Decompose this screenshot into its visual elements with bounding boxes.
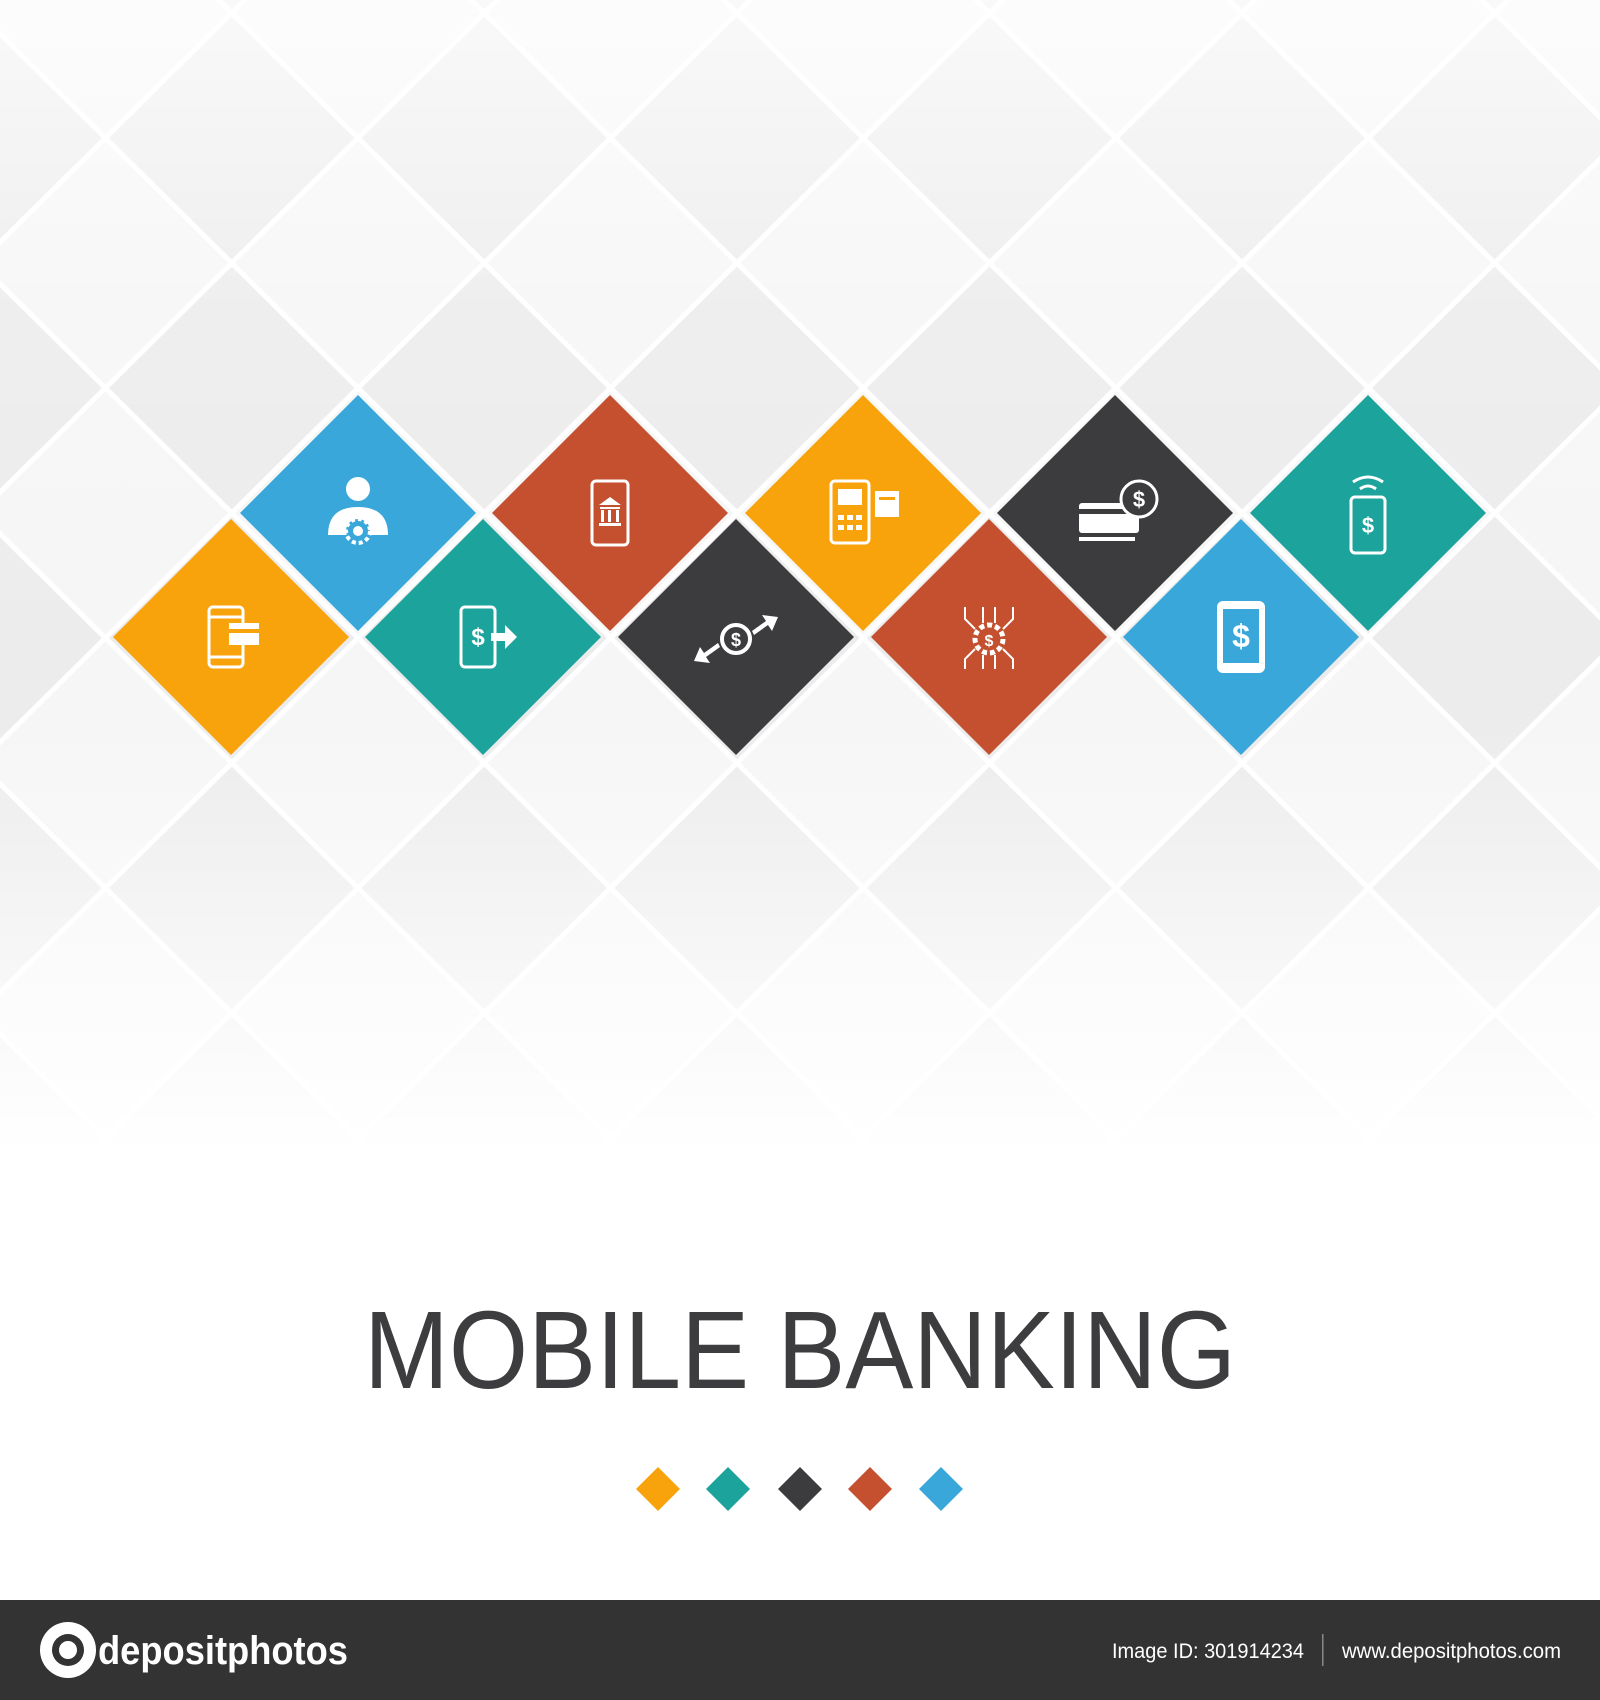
diamond: dark exchange: $ bbox=[731, 630, 741, 650]
diamond: yellow mobile card bbox=[113, 519, 349, 755]
diamond: teal mobile transfer: $ bbox=[471, 624, 485, 651]
footer bar: depositphotos bbox=[98, 1629, 348, 1673]
diamond: dark card coin: $ bbox=[1133, 487, 1145, 512]
diamond: dark card coin bbox=[997, 395, 1233, 631]
diamond: red mobile bank bbox=[492, 395, 728, 631]
diamond: blue mobile dollar: $ bbox=[1232, 618, 1250, 654]
title: MOBILE BANKING bbox=[364, 1289, 1236, 1412]
diamond: yellow card terminal bbox=[745, 395, 981, 631]
color dots bbox=[636, 1467, 963, 1511]
diamond: teal contactless mobile bbox=[1250, 395, 1486, 631]
footer bar bbox=[0, 1600, 1600, 1700]
diamond: teal contactless mobile: $ bbox=[1362, 513, 1374, 538]
diamond: red fintech gear: $ bbox=[985, 633, 994, 650]
diamond: blue mobile dollar bbox=[1123, 519, 1359, 755]
diamond: blue user gear bbox=[240, 395, 476, 631]
diamond: dark exchange bbox=[618, 519, 854, 755]
diamond: teal mobile transfer bbox=[365, 519, 601, 755]
diamond: red fintech gear bbox=[871, 519, 1107, 755]
footer bar: www.depositphotos.com bbox=[1341, 1640, 1561, 1663]
footer bar: Image ID: 301914234 bbox=[1112, 1640, 1304, 1663]
